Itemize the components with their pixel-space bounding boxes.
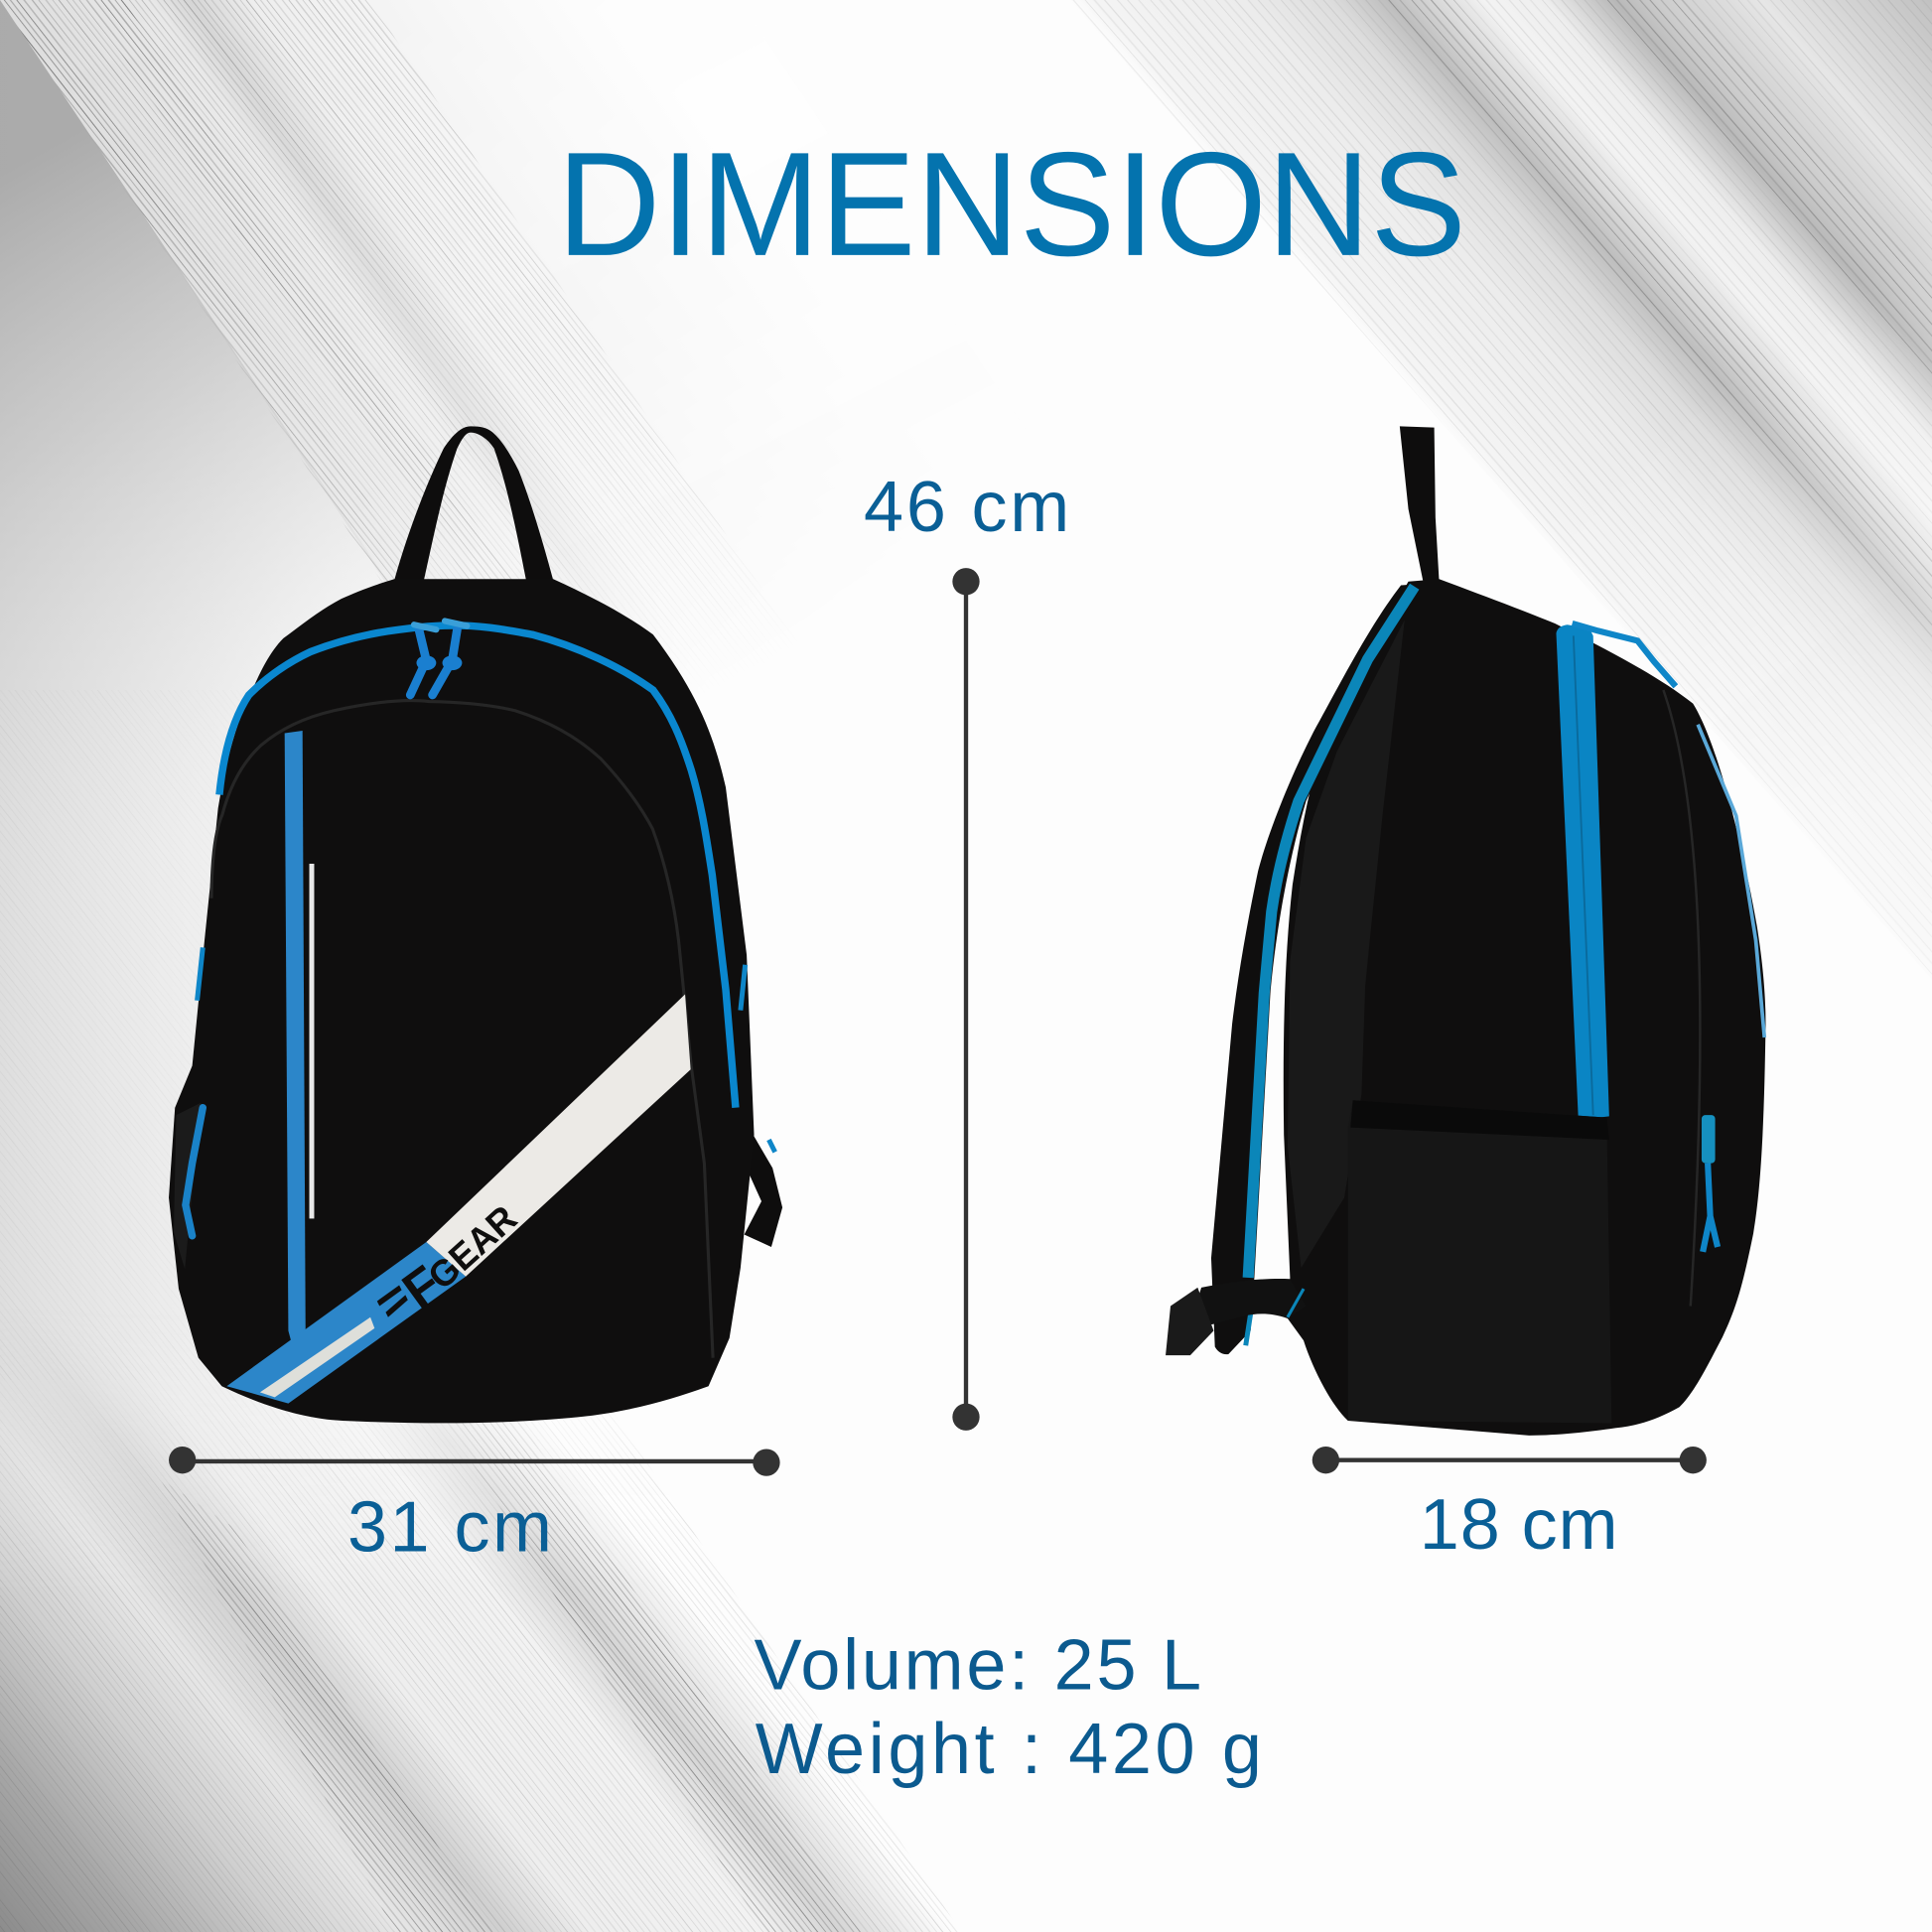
volume text: Volume: 25 L [755, 1626, 1201, 1706]
width label: 31 cm [347, 1488, 552, 1568]
top handle [1400, 426, 1440, 582]
top handle [394, 426, 553, 581]
brand logo: F [392, 1255, 452, 1320]
front seam [1663, 690, 1700, 1307]
top zip puller [1573, 623, 1676, 686]
side blue accents [198, 947, 775, 1152]
side mesh pocket [174, 1103, 201, 1269]
vertical blue stripe [285, 731, 306, 1349]
diagonal blue band [226, 1242, 466, 1404]
brand name GEAR: GEAR [420, 1197, 524, 1298]
diagonal white band [426, 995, 691, 1277]
weight text: Weight : 420 g [756, 1710, 1262, 1789]
title: DIMENSIONS [557, 121, 1466, 287]
outer edge blue trim [1698, 725, 1764, 1037]
thin white reflective line [310, 864, 314, 1218]
vertical blue zipper [1556, 624, 1609, 1120]
depth label: 18 cm [1420, 1485, 1618, 1565]
width dimension line [169, 1447, 780, 1476]
height label: 46 cm [864, 468, 1069, 547]
side view backpack [1166, 426, 1765, 1436]
inner white stripe [260, 1317, 374, 1397]
depth dimension line [1312, 1447, 1707, 1473]
front view backpack [169, 426, 782, 1423]
blue zipper piping [219, 625, 736, 1108]
front pocket seam [211, 701, 713, 1358]
shoulder strap [1211, 584, 1420, 1354]
main body [1284, 579, 1765, 1436]
left side zip puller [186, 1108, 203, 1236]
right shoulder strap stub [740, 1124, 782, 1247]
side zip puller [1702, 1115, 1718, 1252]
mesh side pocket [1348, 1100, 1611, 1423]
strap blue lining [1248, 587, 1415, 1278]
logo lines [377, 1285, 408, 1317]
main body [169, 579, 755, 1423]
zipper pullers [410, 621, 467, 695]
height dimension line [952, 568, 980, 1431]
back padding [1288, 620, 1405, 1268]
lower webbing strap and buckle [1166, 1279, 1307, 1355]
